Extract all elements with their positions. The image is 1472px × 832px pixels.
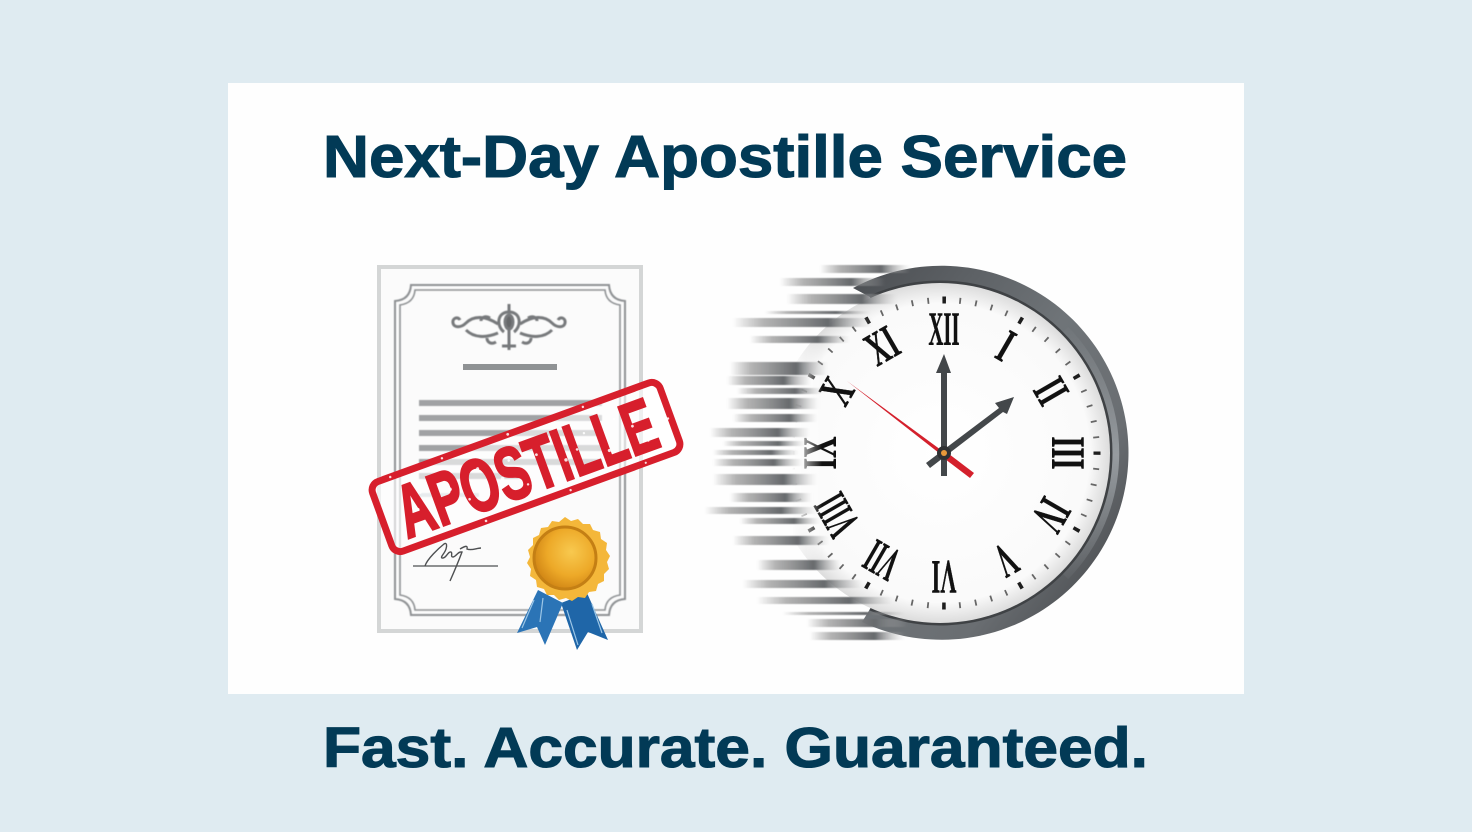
motion blur streaks [705, 265, 910, 640]
roman numerals: III [1041, 436, 1094, 470]
roman numerals: IV [1021, 489, 1081, 541]
title: Next-Day Apostille Service [323, 124, 1127, 190]
roman numerals: XI [856, 316, 908, 376]
roman numerals: VIII [804, 484, 870, 545]
roman numerals: II [1023, 369, 1079, 414]
clock face [770, 283, 1110, 623]
stamp border [370, 380, 682, 554]
document ornate frame [395, 285, 625, 615]
document sheet [379, 267, 641, 631]
roman numerals: IX [794, 436, 847, 470]
roman numerals: X [809, 369, 865, 414]
roman numerals: VII [855, 529, 909, 591]
hour hand [926, 397, 1014, 468]
red second hand [847, 381, 941, 453]
roman numerals: XII [928, 303, 960, 356]
clock bezel [853, 266, 1128, 640]
clock hands [847, 354, 1014, 478]
document flourish ornament [453, 304, 565, 350]
stamp word: APOSTILLE [384, 382, 669, 554]
white image panel [228, 83, 1244, 694]
minute ticks [791, 300, 1097, 606]
gold medallion [534, 527, 596, 589]
centre hub [937, 446, 951, 460]
stamp wear speckles [389, 379, 681, 548]
signature [413, 543, 498, 581]
roman numerals [804, 313, 1084, 593]
document text lines [419, 400, 602, 497]
gold rosette [527, 517, 610, 601]
illustration: certificate document [368, 267, 684, 650]
ribbon tails [561, 593, 608, 650]
roman numerals: VI [932, 550, 956, 603]
document heading bar [463, 364, 557, 370]
roman numerals: I [988, 320, 1024, 372]
roman numerals: V [985, 533, 1027, 587]
apostille stamp [368, 376, 684, 560]
ribbon seal [517, 517, 610, 650]
illustration: speeding clock [705, 265, 1128, 640]
hour ticks [791, 300, 1097, 606]
tagline: Fast. Accurate. Guaranteed. [323, 716, 1148, 780]
minute hand [936, 354, 951, 476]
